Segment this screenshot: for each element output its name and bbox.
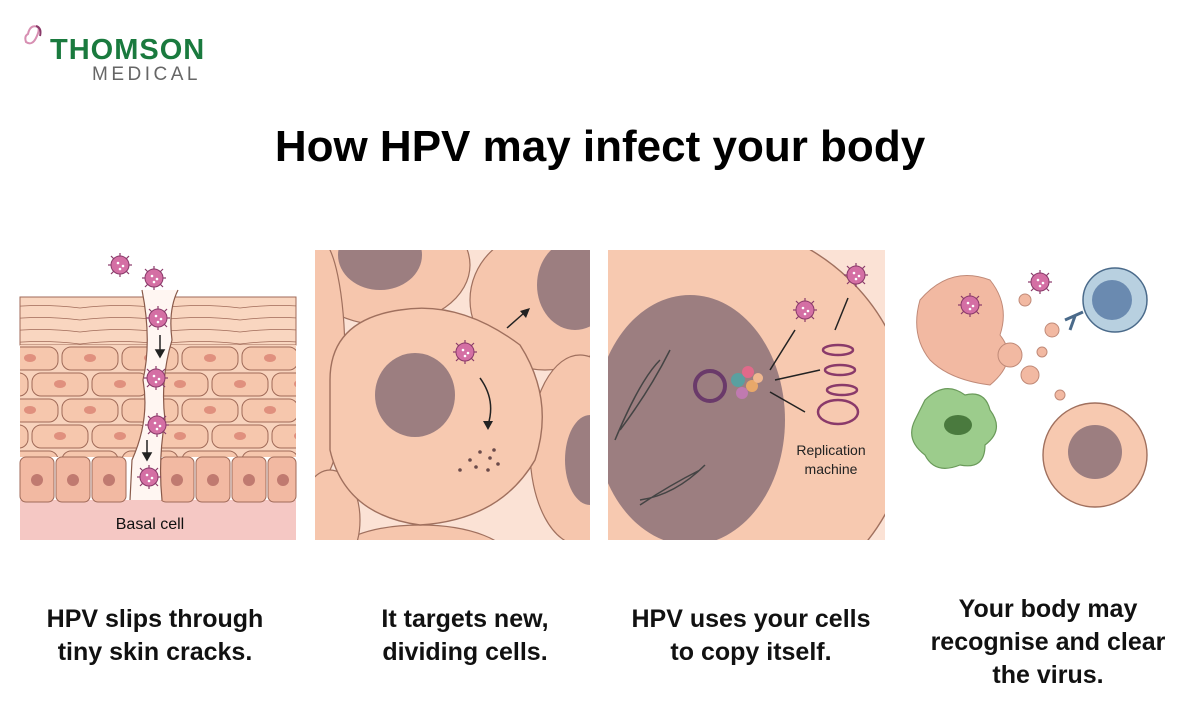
caption 2: dividing cells. xyxy=(382,638,548,666)
caption 2 xyxy=(381,605,549,666)
caption 1 xyxy=(47,605,263,666)
caption 3 xyxy=(631,605,870,666)
logo: MEDICAL xyxy=(92,64,201,85)
logo text: THOMSON xyxy=(50,34,205,66)
caption 4 xyxy=(931,595,1165,689)
viruses xyxy=(108,253,132,277)
panel: replication: Replication xyxy=(796,442,866,458)
caption 4: the virus. xyxy=(992,661,1104,689)
illustrations xyxy=(20,250,1148,540)
logo xyxy=(24,25,205,85)
caption 4: Your body may xyxy=(959,595,1137,623)
icon: butterfly xyxy=(24,25,42,44)
caption 4: recognise and clear xyxy=(931,628,1165,656)
panel: dividing cells xyxy=(315,250,590,540)
caption 3: to copy itself. xyxy=(670,638,832,666)
caption 3: HPV uses your cells xyxy=(631,605,870,633)
caption 1: tiny skin cracks. xyxy=(58,638,252,666)
panel: immune clearance xyxy=(912,268,1147,507)
panel: replication: machine xyxy=(805,461,858,477)
label: basal cell: Basal cell xyxy=(116,516,184,533)
panel: replication xyxy=(608,250,885,540)
panel: skin cracks xyxy=(20,253,296,540)
title: How HPV may infect your body xyxy=(275,122,925,171)
caption 1: HPV slips through xyxy=(47,605,263,633)
caption 2: It targets new, xyxy=(381,605,549,633)
